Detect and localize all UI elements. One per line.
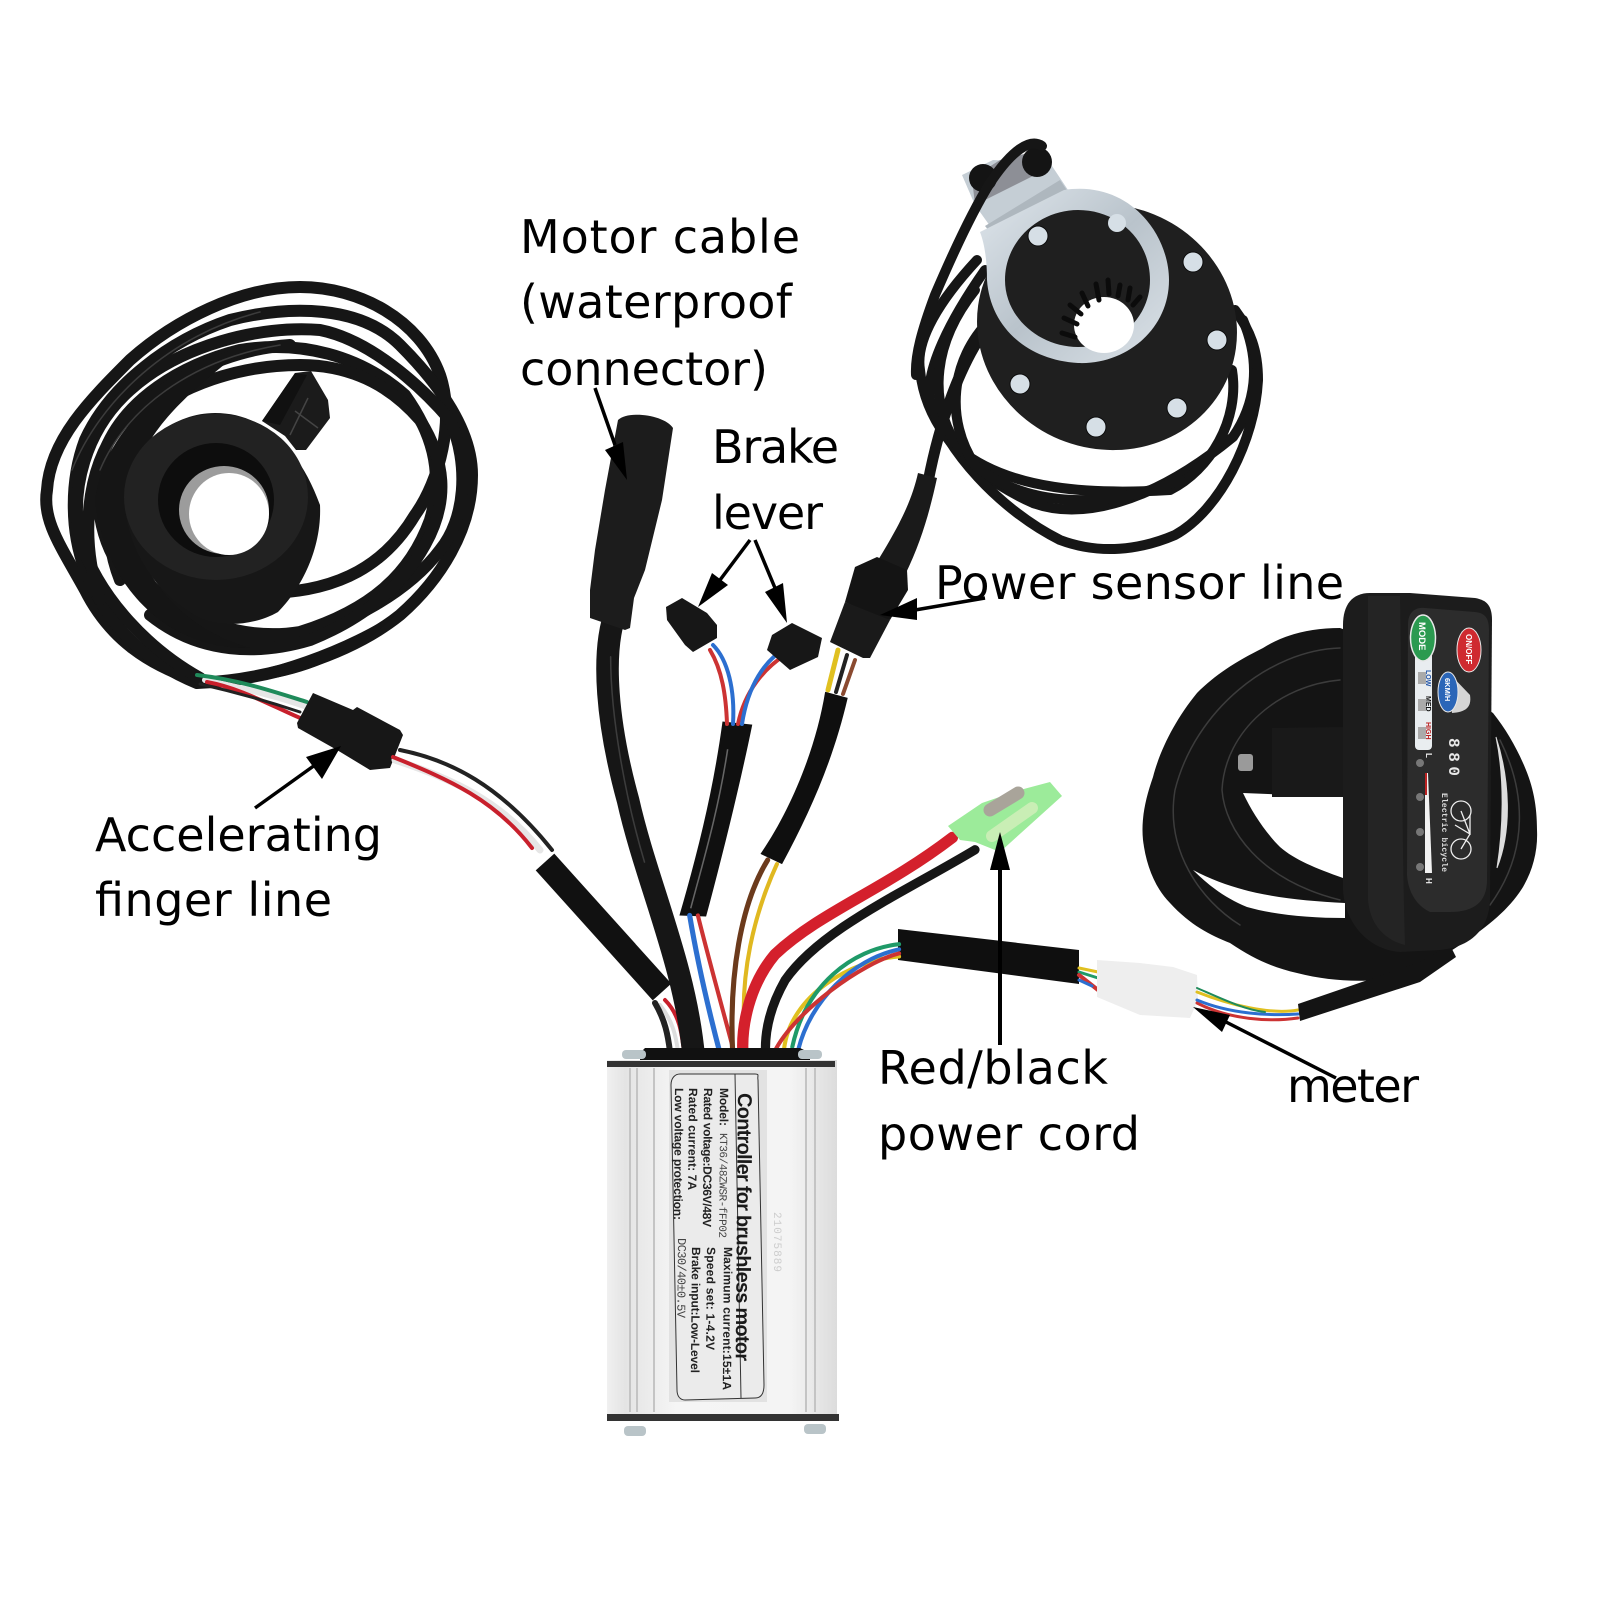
LOW MED HIGH strip: HIGH [1424, 722, 1431, 740]
gear teeth [1062, 280, 1140, 337]
connector head [590, 415, 673, 630]
arrow: motor cable [595, 388, 627, 480]
controller gasket [640, 1048, 810, 1062]
wires below accelerator sheath [655, 1000, 684, 1052]
sensor connector upper [845, 557, 908, 620]
MODE button: MODE [1416, 622, 1427, 650]
clamp bolt [1238, 754, 1253, 771]
gear centre hole [1074, 297, 1134, 353]
green terminal body [948, 782, 1062, 852]
bicycle icon [1451, 801, 1471, 859]
label left column [671, 1088, 731, 1238]
controller box [607, 1048, 839, 1436]
coil solid left band [95, 360, 400, 682]
pedal assist sensor disc with coil [916, 144, 1272, 549]
right coil gap [1496, 737, 1507, 868]
metal bracket ring [980, 189, 1169, 363]
throttle cable coil [46, 287, 472, 683]
ON/OFF button [1457, 628, 1481, 672]
level indicator [1416, 753, 1433, 884]
accelerator sheath [545, 862, 662, 992]
label right column: DC30/40±0.5V [673, 1238, 688, 1319]
throttle front ring [124, 414, 308, 580]
sensor connector lower [830, 602, 890, 658]
brake connector 2 [767, 623, 822, 670]
lower brake wires [690, 915, 735, 1055]
power sensor branch [732, 473, 937, 1055]
sensor strain relief [875, 473, 937, 575]
electric bicycle text: Electric bicycle [1439, 793, 1448, 872]
label left column: Rated voltage:DC36V/48V [700, 1088, 715, 1227]
arrow: brake lever right [755, 540, 787, 623]
body shading [1368, 596, 1405, 945]
spec label [669, 1070, 767, 1402]
sensor wires [828, 650, 855, 694]
motor cable [608, 622, 694, 1057]
label left column: Rated current: 7A [685, 1088, 700, 1190]
label: meter: meter [1287, 1059, 1419, 1113]
6KM/H button: 6KM/H [1443, 678, 1452, 701]
inner magnet peek [1108, 214, 1126, 232]
ON/OFF button: ON/OFF [1464, 634, 1473, 664]
white connector [1097, 960, 1198, 1018]
throttle finger unit with cable coil [46, 287, 684, 1052]
LOW MED HIGH strip: LOW [1424, 670, 1431, 687]
meter body [1343, 593, 1492, 952]
label: connector: connector) [520, 342, 768, 396]
arrow: power sensor [880, 598, 985, 620]
label: brake: Brake [712, 420, 839, 474]
meter face [1407, 608, 1489, 912]
finger lever [262, 371, 330, 450]
sensor lead over bracket [916, 144, 1042, 375]
brown and yellow wires [732, 860, 777, 1055]
metal terminal [990, 793, 1018, 810]
label right column [673, 1238, 735, 1390]
controller housing [607, 1060, 837, 1420]
top band [607, 1061, 835, 1067]
throttle hole [189, 473, 269, 555]
label right column: Speed set: 1-4.2V [703, 1247, 718, 1350]
label: finger line: finger line [95, 873, 332, 927]
throttle inner recess [158, 443, 274, 557]
motor cable with waterproof connector [590, 415, 694, 1057]
sensor cable coil [919, 260, 1258, 549]
LOW MED HIGH strip [1415, 650, 1432, 750]
arrow: meter [1193, 1007, 1336, 1078]
label: red/black: Red/black [878, 1041, 1108, 1095]
red wire [743, 837, 952, 1055]
label: power sensor line: Power sensor line [935, 556, 1344, 610]
arrow: power cord [990, 832, 1010, 1045]
MODE button [1410, 615, 1436, 661]
brake connector 1 [666, 598, 717, 652]
multicolour wires [775, 944, 899, 1051]
bottom band [607, 1414, 839, 1421]
label left column: KT36/48ZWSR-fFP02 [715, 1133, 728, 1238]
housing fins [630, 1068, 815, 1412]
brake lever branch [666, 598, 822, 1055]
coil highlights [72, 312, 280, 470]
6KM/H button [1438, 672, 1470, 713]
sensor disc [942, 168, 1272, 486]
label right column: Maximum current:15±1A [720, 1247, 735, 1390]
sleeve inner [992, 808, 1032, 836]
label right column: Brake input:Low-Level [688, 1247, 703, 1373]
brake sheath [679, 721, 752, 916]
lower lead to sheath [928, 330, 985, 482]
meter sheath [898, 929, 1079, 984]
label: accelerating: Accelerating [95, 808, 382, 862]
label: motor cable: Motor cable [520, 210, 800, 264]
mounting tab and screws [962, 147, 1068, 240]
connector wires [1197, 988, 1298, 1020]
black wire [765, 850, 975, 1055]
disc magnets [1010, 226, 1227, 437]
arrow: accelerating finger [255, 746, 341, 808]
label left column: Model: [717, 1088, 731, 1126]
label title: Controller for brushless motor [731, 1093, 755, 1361]
sensor sheath [760, 692, 848, 864]
label left column: Low voltage protection: [671, 1088, 686, 1220]
wires between sheath and connector [1079, 968, 1098, 990]
lead cable [1298, 945, 1456, 1021]
metal sleeve [179, 466, 269, 554]
level indicator: H [1424, 878, 1433, 884]
LOW MED HIGH strip: MED [1424, 696, 1431, 712]
level indicator: L [1424, 753, 1433, 758]
meter coil [1142, 628, 1537, 981]
serial number: 21075889 [770, 1212, 782, 1272]
meter display with cable coil [1142, 593, 1537, 1021]
model number: 880 [1444, 738, 1462, 776]
screws [622, 1050, 826, 1436]
label: waterproof: (waterproof [520, 275, 794, 329]
handlebar clamp [1272, 727, 1345, 797]
red and black power cord [743, 782, 1062, 1055]
brake wires [710, 645, 786, 724]
label: lever: lever [712, 486, 823, 540]
coil cable highlights [1173, 648, 1519, 925]
arrow: brake lever left [698, 540, 750, 607]
throttle wires and connector [197, 675, 552, 850]
throttle body [125, 413, 320, 624]
meter wiring [775, 929, 1298, 1051]
label: power cord: power cord [878, 1107, 1140, 1161]
sheath highlight [691, 749, 728, 908]
cable highlight [611, 657, 645, 862]
